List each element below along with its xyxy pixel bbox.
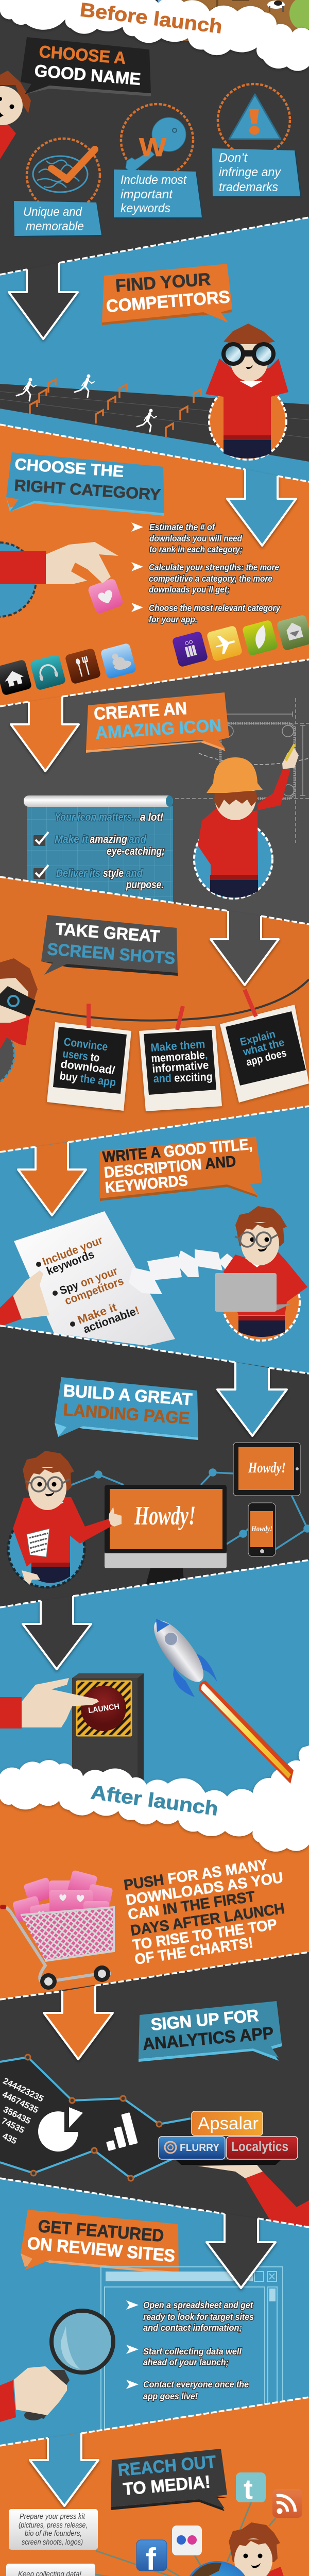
list: category tips: Calculate your strengths: the more — [149, 562, 279, 572]
speech bubble: build a great landing page: LANDING PAGE — [63, 1400, 190, 1428]
icon: facebook: f — [146, 2542, 157, 2576]
speech bubble: find your competitors: COMPETITORS — [106, 287, 231, 316]
numbers: raw data stream: 74535 — [0, 2116, 26, 2136]
panel: push for downloads — [0, 1788, 309, 2002]
illustration: browser window outline — [101, 2267, 283, 2432]
character: boy with camera — [0, 958, 38, 1089]
speech bubble: take great screen shots — [41, 915, 178, 976]
caption: include most important keywords — [114, 170, 203, 219]
heading: before launch: Before launch — [79, 0, 224, 38]
photo: explain what the app does: app does — [245, 1047, 288, 1069]
caption: unique and memorable: memorable — [26, 219, 84, 233]
icon: twitter — [236, 2472, 266, 2505]
callout: prepare your press kit: (pictures, press release, — [19, 2521, 88, 2530]
list: review site tips: Start collecting data well — [143, 2346, 242, 2357]
logo: Flurry — [159, 2137, 225, 2159]
photo: convince users: download/ — [60, 1057, 116, 1077]
illustration: phone saying Howdy — [248, 1503, 276, 1556]
chart: analytics data line panel — [0, 2055, 196, 2181]
speech bubble: get featured on review sites: GET FEATURED — [37, 2216, 165, 2246]
photo: convince users: buy the app — [59, 1069, 117, 1089]
icon: bar chart — [100, 2112, 138, 2151]
numbers: raw data stream: 244423235 — [2, 2076, 45, 2104]
icon: key with W: W — [139, 133, 167, 162]
document: keyword tips — [14, 1211, 175, 1346]
arrow: down to choose the right category — [227, 469, 296, 546]
callout: prepare your press kit: Prepare your press kit — [20, 2512, 85, 2521]
panel: write a good title — [0, 1106, 309, 1376]
numbers: raw data stream: 435 — [1, 2131, 19, 2146]
speech bubble: write a good title — [100, 1136, 262, 1201]
list: category tips — [131, 522, 281, 624]
panel: choose the right category — [0, 425, 309, 711]
callout: keep collecting data — [6, 2564, 95, 2576]
illustration: countryside at top — [139, 0, 309, 41]
character: boy holding globe — [184, 2522, 297, 2576]
illustration: hurdles track with runners — [0, 374, 309, 462]
photo: make them memorable: Make them — [150, 1038, 205, 1054]
heading: after launch: After launch — [90, 1782, 219, 1820]
panel: before launch, choose a good name — [0, 0, 309, 278]
caption: include most important keywords: keywords — [121, 201, 170, 215]
text: push for as many downloads — [123, 1857, 286, 1968]
numbers: raw data stream: 44674535 — [1, 2089, 40, 2115]
illustration: icon blueprint lines — [175, 698, 309, 843]
document: keyword tips: Make it — [76, 1300, 119, 1327]
illustration: hand holding pink app icon — [0, 542, 124, 617]
cloud: before launch header — [0, 0, 309, 71]
text: push for as many downloads: PUSH FOR AS MANY — [123, 1857, 269, 1894]
arrow: down to write a good title — [18, 1142, 86, 1215]
illustration: hand pressing launch — [0, 1678, 99, 1728]
list: category tips: competitive a category, the more — [149, 573, 272, 584]
speech bubble: take great screen shots: TAKE GREAT — [55, 919, 161, 946]
illustration: hand carrying analytics logos tray — [159, 2111, 309, 2231]
blueprint paper: your icon matters: Your icon matters... — [55, 811, 140, 823]
illustration: shopping cart full of app icons — [0, 1870, 114, 1990]
illustration: launch button pillar: LAUNCH — [88, 1702, 120, 1715]
logo: Localytics — [227, 2137, 298, 2159]
logo: Localytics: Localytics — [231, 2139, 288, 2154]
character: boy with glasses and keyboard — [8, 1451, 122, 1587]
logo: Flurry: FLURRY — [180, 2142, 220, 2154]
illustration: hand with magnifying glass — [0, 2311, 113, 2422]
list: review site tips: ready to look for target sites — [143, 2312, 254, 2322]
blueprint paper: your icon matters: amazing — [90, 834, 127, 845]
list: category tips: downloads you will need — [149, 533, 242, 544]
photo: explain what the app does — [220, 1005, 309, 1103]
arrow: down to build a landing page — [217, 1362, 287, 1436]
numbers: raw data stream: 356435 — [2, 2105, 32, 2126]
caption: don't infringe any trademarks: infringe any — [219, 165, 282, 179]
caption: unique and memorable: Unique and — [23, 205, 82, 219]
caption: include most important keywords: Include most — [121, 173, 187, 187]
speech bubble: choose the right category: CHOOSE THE — [14, 455, 124, 481]
speech bubble: write a good title: DESCRIPTION AND — [104, 1153, 237, 1181]
list: review site tips: Open a spreadsheet and get — [143, 2300, 253, 2310]
speech bubble: reach out to media: REACH OUT — [117, 2452, 217, 2480]
illustration: tablet saying Howdy — [233, 1443, 300, 1496]
illustration: clothesline with polaroid photos — [36, 979, 309, 1111]
document: keyword tips: keywords — [45, 1248, 96, 1278]
speech bubble: sign up for analytics app: SIGN UP FOR — [150, 2006, 260, 2034]
text: push for as many downloads: OF THE CHARTS! — [133, 1935, 254, 1968]
speech bubble: sign up for analytics app: ANALYTICS APP — [142, 2023, 274, 2054]
icons: app category tiles — [0, 614, 309, 696]
speech bubble: build a great landing page: BUILD A GREAT — [63, 1381, 193, 1409]
character: boy with binoculars — [205, 324, 288, 460]
photo: explain what the app does: Explain — [239, 1028, 277, 1048]
photo: make them memorable: and exciting — [153, 1070, 213, 1085]
speech bubble: choose the right category: RIGHT CATEGORY — [14, 476, 162, 504]
speech bubble: write a good title: WRITE A GOOD TITLE, — [102, 1136, 253, 1166]
panel: create an amazing icon — [0, 659, 309, 927]
blueprint paper: your icon matters: Deliver its — [56, 868, 100, 879]
callout: prepare your press kit — [9, 2509, 98, 2550]
speech bubble: create an amazing icon — [86, 692, 229, 753]
photo: convince users: users to — [62, 1047, 100, 1064]
character: boy peeking at left edge — [0, 71, 31, 159]
illustration: rocket with flame — [146, 1614, 294, 1784]
speech bubble: reach out to media — [111, 2449, 227, 2511]
text: push for as many downloads: DAYS AFTER LAUNCH — [129, 1901, 286, 1939]
caption: include most important keywords: important — [121, 188, 173, 201]
illustration: pages flying from laptop — [129, 1249, 247, 1294]
cloud: after launch header — [0, 1745, 309, 1852]
icon: flickr — [172, 2526, 202, 2555]
text: push for as many downloads: TO RISE TO THE TOP — [131, 1916, 278, 1954]
character: boy with glasses and laptop — [215, 1206, 307, 1341]
icon: rss — [272, 2489, 302, 2518]
photo: convince users: Convince — [63, 1035, 109, 1053]
list: review site tips: and contact information; — [143, 2323, 242, 2333]
caption: unique and memorable — [14, 201, 102, 238]
icon: key with W — [121, 104, 193, 176]
speech bubble: get featured on review sites — [21, 2210, 179, 2275]
photo: make them memorable — [139, 1026, 222, 1111]
speech bubble: create an amazing icon: CREATE AN — [93, 699, 187, 724]
speech bubble: choose a good name — [21, 37, 151, 96]
document: keyword tips: competitors — [63, 1274, 125, 1308]
icon: warning triangle — [218, 84, 290, 156]
list: review site tips — [126, 2300, 254, 2401]
speech bubble: get featured on review sites: ON REVIEW SITES — [26, 2233, 176, 2266]
photo: explain what the app does: what the — [242, 1037, 286, 1058]
callout: prepare your press kit: screen shoots, logos) — [22, 2538, 83, 2547]
speech bubble: sign up for analytics app — [139, 2001, 282, 2062]
blueprint paper: your icon matters — [24, 795, 173, 904]
panel: launch scene — [0, 1560, 309, 1855]
speech bubble: take great screen shots: SCREEN SHOTS — [46, 939, 176, 968]
icon: pie chart — [38, 2107, 83, 2151]
document: keyword tips: Include your — [41, 1233, 105, 1268]
numbers: raw data stream — [0, 2076, 45, 2146]
list: category tips: Estimate the # of — [149, 522, 216, 532]
photo: make them memorable: memorable, — [151, 1048, 208, 1065]
icon: twitter: t — [244, 2474, 253, 2505]
blueprint paper: your icon matters: and — [126, 868, 143, 879]
callout: prepare your press kit: bio of the founders, — [25, 2529, 82, 2538]
arrow: down to sign up — [44, 1986, 113, 2059]
list: category tips: Choose the most relevant category — [149, 603, 281, 613]
list: category tips: to rank in each category; — [149, 544, 243, 554]
list: category tips: for your app. — [149, 614, 197, 624]
speech bubble: write a good title: KEYWORDS — [105, 1172, 188, 1196]
blueprint paper: your icon matters: style — [103, 868, 124, 879]
arrow: down to review sites — [207, 2214, 276, 2288]
list: review site tips: ahead of your launch; — [143, 2357, 229, 2367]
arrow: down to reach out — [30, 2433, 98, 2506]
speech bubble: choose a good name: GOOD NAME — [33, 61, 142, 89]
logo: Apsalar — [192, 2111, 263, 2136]
speech bubble: choose the right category — [6, 452, 164, 516]
photo: convince users — [47, 1022, 131, 1111]
blueprint paper: your icon matters: Make it — [55, 834, 89, 845]
speech bubble: choose a good name: CHOOSE A — [38, 42, 127, 67]
illustration: desktop monitor saying Howdy — [105, 1485, 227, 1587]
logo: Apsalar: Apsalar — [198, 2114, 259, 2133]
text: push for as many downloads: CAN IN THE FIRST — [127, 1888, 256, 1923]
speech bubble: build a great landing page — [55, 1377, 198, 1440]
document: keyword tips: Spy on your — [58, 1264, 119, 1297]
chart line: network connecting devices — [69, 1469, 309, 1549]
connector lines to globe — [95, 2502, 276, 2576]
list: review site tips: app goes live! — [143, 2391, 198, 2401]
speech bubble: find your competitors — [102, 264, 232, 325]
panel: take great screen shots — [0, 877, 309, 1157]
blueprint paper: your icon matters: purpose. — [126, 879, 164, 891]
arrow: down to take great screen shots — [211, 911, 279, 985]
panel: find your competitors — [0, 217, 309, 484]
character: boy with helmet drawing — [194, 743, 299, 899]
photo: make them memorable: informative — [152, 1058, 209, 1075]
caption: don't infringe any trademarks: Don’t — [219, 151, 248, 165]
speech bubble: reach out to media: TO MEDIA! — [122, 2472, 211, 2499]
panel: build a great landing page — [0, 1326, 309, 1612]
caption: don't infringe any trademarks — [212, 148, 302, 198]
speech bubble: create an amazing icon: AMAZING ICON — [95, 716, 222, 743]
illustration: launch button pillar — [72, 1673, 144, 1799]
speech bubble: find your competitors: FIND YOUR — [115, 269, 211, 296]
illustration: tablet saying Howdy: Howdy! — [248, 1460, 286, 1476]
arrow: down to create an icon — [11, 697, 79, 771]
blueprint paper: your icon matters: and — [129, 834, 147, 845]
caption: don't infringe any trademarks: trademarks — [219, 180, 278, 194]
list: category tips: downloads you´ll get; — [149, 584, 230, 595]
panel: get featured on review sites — [0, 2178, 309, 2450]
icon: brain with check mark — [27, 139, 100, 212]
list: review site tips: Contact everyone once the — [143, 2379, 249, 2389]
arrow: down to find your competitors — [9, 263, 78, 339]
document: keyword tips: actionable! — [81, 1303, 141, 1336]
panel: reach out to media — [0, 2397, 309, 2576]
blueprint paper: your icon matters: a lot! — [140, 811, 163, 823]
illustration: phone saying Howdy: Howdy! — [251, 1525, 272, 1533]
arrow: down to launch — [23, 1596, 91, 1669]
text: push for as many downloads: DOWNLOADS AS YOU — [125, 1870, 284, 1909]
blueprint paper: your icon matters: eye-catching; — [107, 845, 165, 857]
illustration: desktop monitor saying Howdy: Howdy! — [134, 1501, 196, 1531]
illustration: hand holding paper — [0, 1270, 49, 1327]
panel: sign up for analytics app — [0, 1952, 309, 2231]
icon: facebook — [136, 2540, 167, 2576]
